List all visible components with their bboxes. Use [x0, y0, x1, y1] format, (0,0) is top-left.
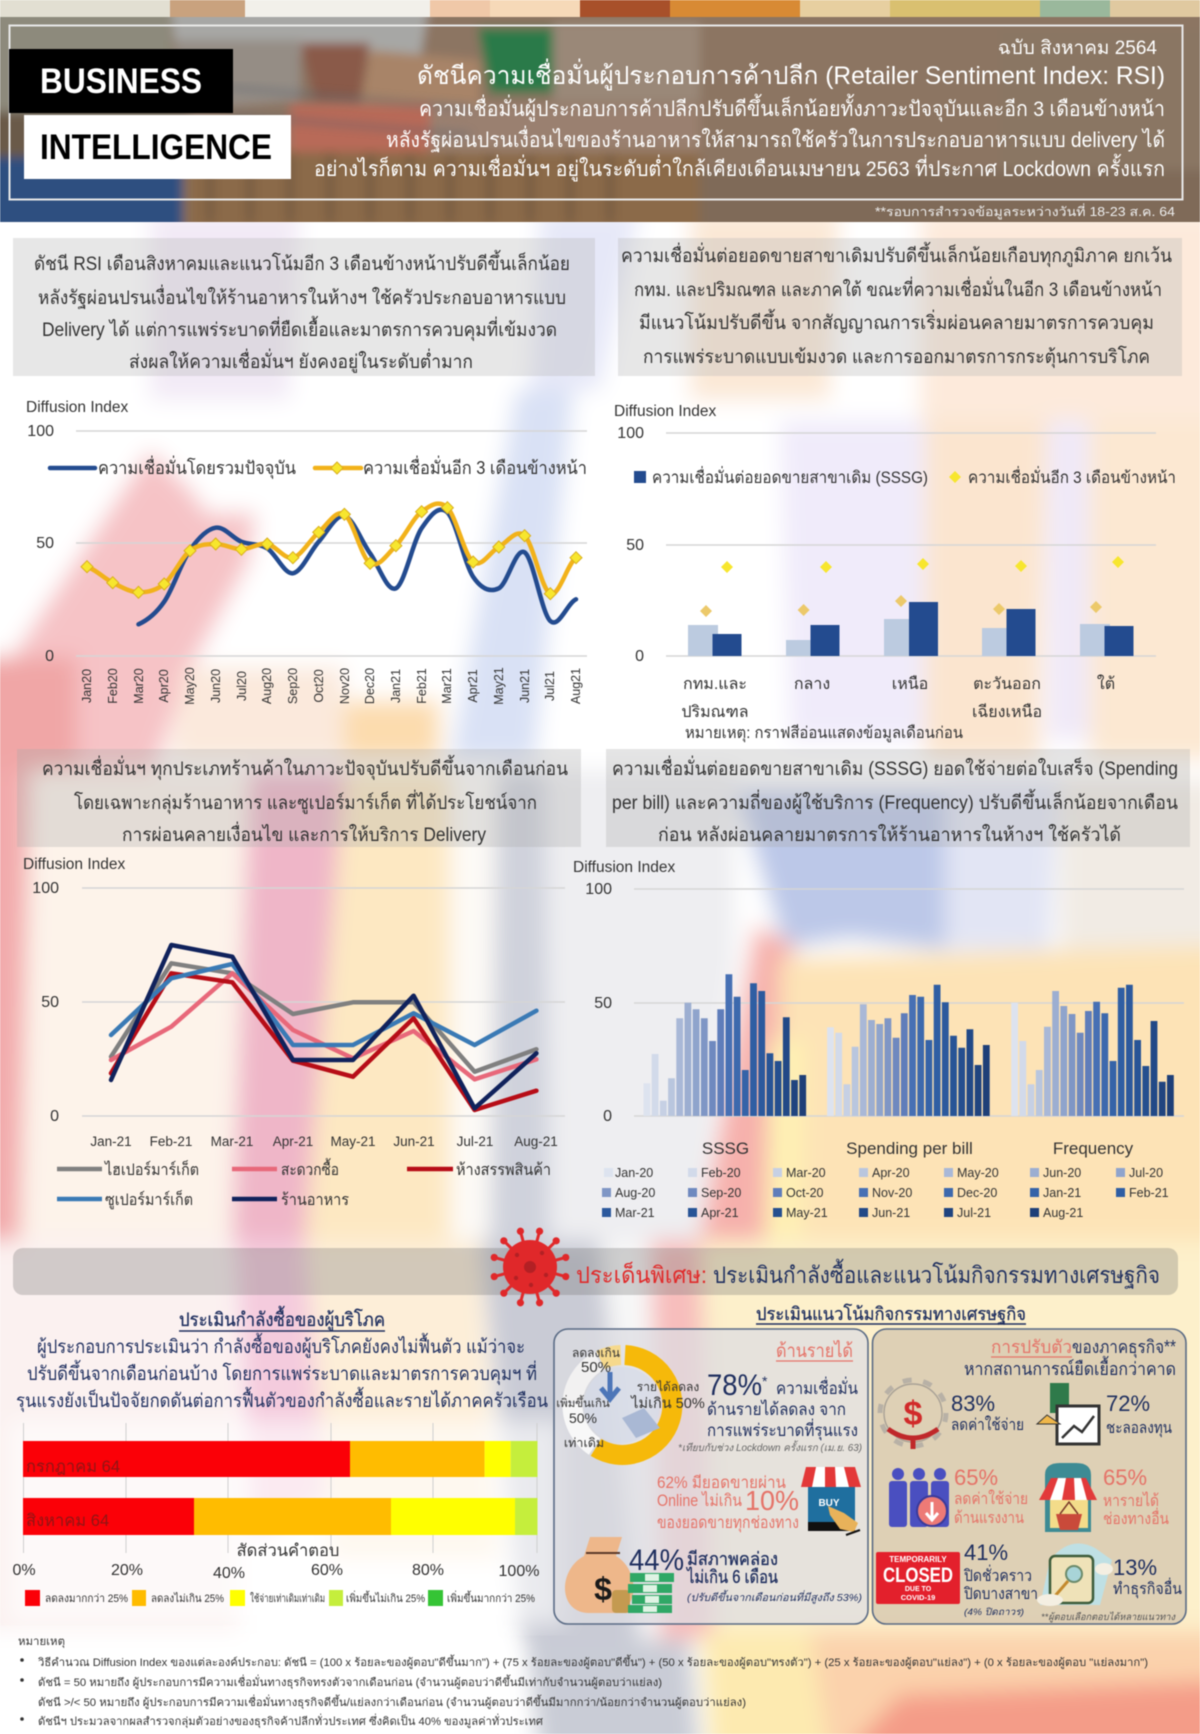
panel: SSSG spending frequency summary: ก่อน หลังผ่อนคลายมาตรการให้ร้านอาหารในห้างฯ ใช้ครัวได้ — [658, 824, 1121, 846]
axis percent labels: 60% — [311, 1562, 343, 1579]
axis labels: months 2021: Feb-21 — [150, 1134, 192, 1149]
legend: months: Mar-21 — [615, 1206, 655, 1220]
axis labels: months 2021: Apr-21 — [273, 1134, 313, 1149]
legend: overall sentiment: ความเชื่อมั่นโดยรวมปัจจุบัน — [98, 455, 296, 479]
text block: purchasing power: ปรับดีขึ้นจากเดือนก่อนบ้าง โดยการแพร่ระบาดและมาตรการควบคุมฯ ที่ — [27, 1360, 537, 1386]
notes: ดัชนี = 50 หมายถึง ผู้ประกอบการมีความเชื่อมั่นทางธุรกิจทรงตัวจากเดือนก่อน (จำนวนผู้ตอบว่าดีขึ้นมีเท่ากับจำนวนผู้ตอบว่าแย่ลง) — [38, 1674, 662, 1689]
stat: 83 percent: ลดค่าใช้จ่าย — [951, 1415, 1024, 1434]
panel: SSSG by region summary — [618, 238, 1182, 376]
line: hypermarket — [111, 963, 536, 1072]
panel: RSI summary: ดัชนี RSI เดือนสิงหาคมและแนวโน้มอีก 3 เดือนข้างหน้าปรับดีขึ้นเล็กน้อย — [34, 250, 570, 275]
notes — [18, 1636, 1148, 1728]
line: convenience store — [111, 973, 536, 1079]
notes: ดัชนีฯ ประมวลจากผลสำรวจกลุ่มตัวอย่างของธุรกิจค้าปลีกทั่วประเทศ ซึ่งคิดเป็น 40% ของมูลค่าทั่วประเทศ — [38, 1713, 543, 1728]
group labels: Frequency — [1053, 1139, 1134, 1158]
stat: 41 percent — [964, 1540, 1038, 1618]
icon: temporarily closed sign: COVID-19 — [901, 1593, 935, 1602]
stat: 72 percent — [1106, 1391, 1172, 1438]
panel heading: ของภาคธุรกิจ** — [1072, 1337, 1176, 1358]
stat: online 10 percent: Online ไม่เกิน — [657, 1491, 742, 1510]
chart: overall sentiment line chart: 100 — [27, 423, 54, 440]
axis labels: months 2021: Jan-21 — [90, 1134, 132, 1149]
panel heading: การปรับตัว — [991, 1337, 1072, 1357]
chart: overall sentiment line chart: 50 — [36, 535, 54, 552]
chart: overall sentiment line chart: Diffusion Index — [26, 399, 128, 416]
legend: store types: ไฮเปอร์มาร์เก็ต — [103, 1159, 199, 1179]
stat: 41 percent: (4% ปิดถาวร) — [964, 1607, 1024, 1618]
special topic band: ประเด็นพิเศษ: — [576, 1260, 707, 1288]
legend: months: Jul-21 — [957, 1206, 991, 1220]
logo: INTELLIGENCE: INTELLIGENCE — [40, 128, 272, 167]
panel: RSI summary — [13, 238, 595, 376]
donut labels: ไม่เกิน 50% — [630, 1394, 705, 1412]
bars: previous month — [688, 619, 1110, 656]
notes: หมายเหตุ — [18, 1636, 65, 1648]
axis percent labels: 20% — [111, 1562, 143, 1579]
group labels: SSSG — [702, 1139, 749, 1158]
icon: money bag: $ — [594, 1571, 612, 1607]
axis labels: months 2021: Jul-21 — [457, 1134, 493, 1149]
donut labels — [556, 1346, 705, 1450]
legend: store types: ร้านอาหาร — [281, 1191, 349, 1209]
panel: store types summary: ความเชื่อมั่นฯ ทุกประเภทร้านค้าในภาวะปัจจุบันปรับดีขึ้นจากเดือนก่อน — [42, 755, 568, 781]
axis labels: months — [80, 667, 583, 705]
legend: response scale: ลดลงไม่เกิน 25% — [151, 1592, 224, 1605]
legend: months: May-21 — [786, 1206, 828, 1220]
panel: business adaptation — [872, 1329, 1186, 1624]
legend: months: Jan-21 — [1043, 1186, 1081, 1200]
stat: 83 percent — [951, 1391, 1024, 1434]
panel: store types summary: โดยเฉพาะกลุ่มร้านอาหาร และซูเปอร์มาร์เก็ต ที่ได้ประโยชน์จาก — [74, 789, 537, 815]
header text block: ความเชื่อมั่นผู้ประกอบการค้าปลีกปรับดีขึ้นเล็กน้อยทั้งภาวะปัจจุบันและอีก 3 เดือนข้างหน้า — [419, 94, 1165, 122]
stat: 65 percent labour: ด้านแรงงาน — [954, 1509, 1024, 1527]
stat: 65 percent labour: ลดค่าใช้จ่าย — [954, 1489, 1028, 1508]
chart: sentiment by store type — [23, 856, 565, 1210]
stat: 78 percent: 78% — [707, 1369, 762, 1402]
icon: virus — [490, 1227, 570, 1307]
stat: 13 percent: ทำธุรกิจอื่น — [1113, 1577, 1182, 1599]
panel: income: ด้านรายได้ — [776, 1340, 853, 1362]
stat: 78 percent — [678, 1369, 862, 1454]
stat: online 10 percent: 62% มียอดขายผ่าน — [657, 1474, 786, 1492]
chart: SSSG spending per bill frequency: 100 — [585, 881, 612, 898]
stat: 78 percent: ความเชื่อมั่น — [776, 1376, 858, 1398]
stat: 44 percent — [629, 1544, 862, 1604]
donut labels: 50% — [581, 1359, 611, 1376]
legend: response scale: ลดลงมากกว่า 25% — [45, 1593, 128, 1605]
legend: months: Jun-20 — [1043, 1166, 1081, 1180]
stat: 78 percent: *เทียบกับช่วง Lockdown ครั้งแรก (เม.ย. 63) — [678, 1440, 862, 1454]
stat: 65 percent new channel: ช่องทางอื่น — [1103, 1507, 1169, 1528]
stat: 44 percent: มีสภาพคล่อง — [687, 1549, 778, 1569]
notes: ดัชนี >/< 50 หมายถึง ผู้ประกอบการมีความเชื่อมั่นทางธุรกิจดีขึ้น/แย่ลงกว่าเดือนก่อน (จำนวนผู้ตอบว่าดีขึ้นมีมากกว่า/น้อยกว่าจำนวนผู้ตอบว่าแย่ลง) — [38, 1694, 746, 1709]
stat: 65 percent labour: 65% — [954, 1465, 998, 1490]
line: supermarket — [111, 964, 536, 1045]
legend: months: Oct-20 — [786, 1186, 824, 1200]
bars: frequency — [1015, 985, 1170, 1116]
panel: SSSG by region summary: มีแนวโน้มปรับดีขึ้น จากสัญญาณการเริ่มผ่อนคลายมาตรการควบคุม — [639, 309, 1154, 335]
axis labels: months: Aug20 — [260, 668, 274, 704]
chart: SSSG spending per bill frequency — [573, 859, 1184, 1220]
donut labels: รายได้ลดลง — [637, 1380, 699, 1394]
category labels: ปริมณฑล — [681, 704, 749, 721]
axis labels: months 2021: Mar-21 — [211, 1134, 253, 1149]
category labels: กทม.และ — [683, 676, 747, 693]
legend: response scale: เพิ่มขึ้นมากกว่า 25% — [447, 1590, 535, 1605]
legend: store types: ซูเปอร์มาร์เก็ต — [105, 1189, 193, 1210]
legend: store types — [57, 1158, 551, 1210]
chart: SSSG spending per bill frequency: 0 — [603, 1108, 612, 1125]
stat: online 10 percent: 10% — [745, 1485, 799, 1516]
axis labels: months: Jul20 — [235, 671, 249, 701]
legend: response scale — [25, 1590, 535, 1606]
panel: SSSG by region summary: การแพร่ระบาดแบบเข้มงวด และการออกมาตรการกระตุ้นการบริโภค — [643, 345, 1150, 369]
panel heading: หากสถานการณ์ยืดเยื้อกว่าคาด — [964, 1356, 1176, 1379]
legend: months: Apr-20 — [872, 1166, 910, 1180]
line: restaurant — [111, 945, 536, 1108]
axis labels: months 2021 — [90, 1134, 558, 1149]
legend: SSSG: ความเชื่อมั่นอีก 3 เดือนข้างหน้า — [968, 466, 1176, 487]
axis labels: months: May20 — [183, 667, 197, 705]
chart: SSSG spending per bill frequency: 50 — [594, 995, 612, 1012]
donut chart: income — [572, 1355, 672, 1455]
legend: months: Apr-21 — [701, 1206, 739, 1220]
text block: purchasing power — [16, 1333, 548, 1413]
chart: SSSG by region bar chart: 100 — [617, 425, 644, 442]
donut labels: เท่าเดิม — [564, 1436, 604, 1450]
chart: overall sentiment line chart: 0 — [45, 648, 54, 665]
stat: 78 percent: * — [762, 1373, 768, 1389]
bars: spending per bill — [830, 985, 986, 1116]
axis percent labels — [12, 1562, 539, 1582]
icon: online shop phone: BUY — [818, 1498, 840, 1509]
legend: months: Dec-20 — [957, 1186, 997, 1200]
stat: 41 percent: 41% — [964, 1540, 1008, 1565]
axis labels: months 2021: Aug-21 — [514, 1134, 558, 1149]
chart: sentiment by store type: 0 — [50, 1108, 59, 1125]
logo: INTELLIGENCE — [24, 115, 291, 179]
chart: stacked bars purchasing power: สัดส่วนคำตอบ — [237, 1542, 339, 1560]
panel: RSI summary: Delivery ได้ แต่การแพร่ระบาดที่ยืดเยื้อและมาตรการควบคุมที่เข้มงวด — [42, 316, 557, 342]
axis percent labels: 40% — [213, 1565, 245, 1582]
panel: income — [554, 1329, 868, 1624]
panel: RSI summary: หลังรัฐผ่อนปรนเงื่อนไขให้ร้านอาหารในห้างฯ ใช้ครัวประกอบอาหารแบบ — [38, 284, 566, 309]
header text block: **รอบการสำรวจข้อมูลระหว่างวันที่ 18-23 ส.ค. 64 — [875, 203, 1175, 220]
stat: 13 percent: 13% — [1113, 1555, 1157, 1580]
icon: magnifier other business — [1037, 1544, 1113, 1606]
heading: purchasing power: ประเมินกำลังซื้อของผู้บริโภค — [179, 1306, 385, 1331]
legend: response scale: ใช้จ่ายเท่าเดิมเท่าเดิม — [250, 1592, 325, 1605]
icon: investment chart — [1037, 1383, 1099, 1444]
legend: months: May-20 — [957, 1166, 999, 1180]
text block: purchasing power: ผู้ประกอบการประเมินว่า กำลังซื้อของผู้บริโภคยังคงไม่ฟื้นตัว แม้ว่าจะ — [37, 1333, 525, 1358]
panel: store types summary: การผ่อนคลายเงื่อนไข และการให้บริการ Delivery — [122, 821, 486, 846]
axis labels: months: Feb20 — [106, 668, 120, 704]
axis labels: months: Jun21 — [518, 669, 532, 703]
legend: months: Aug-21 — [1043, 1206, 1083, 1220]
icon: online shop phone — [801, 1467, 861, 1535]
chart: sentiment by store type: 50 — [41, 994, 59, 1011]
markers: 3-month outlook — [81, 502, 582, 600]
category labels: ใต้ — [1097, 674, 1115, 693]
donut labels: ลดลงเกิน — [572, 1346, 620, 1360]
stat: 78 percent: การแพร่ระบาดที่รุนแรง — [707, 1418, 858, 1441]
stat: 65 percent new channel — [1103, 1465, 1169, 1528]
line: 3-month outlook — [87, 504, 576, 594]
legend: store types: ห้างสรรพสินค้า — [456, 1161, 551, 1179]
bars: current month — [712, 602, 1134, 656]
category labels: ตะวันออก — [973, 676, 1041, 693]
stat: 65 percent labour — [954, 1465, 1028, 1527]
stat: 78 percent: ด้านรายได้ลดลง จาก — [707, 1399, 846, 1419]
legend: months: Mar-20 — [786, 1166, 826, 1180]
axis labels: months: Oct20 — [312, 669, 326, 703]
bars: SSSG — [647, 974, 803, 1116]
stat: 72 percent: 72% — [1106, 1391, 1150, 1416]
stat: online 10 percent: ของยอดขายทุกช่องทาง — [657, 1514, 799, 1533]
axis labels: months: Feb21 — [415, 668, 429, 704]
group labels: Spending per bill — [846, 1139, 973, 1158]
axis labels: months: Dec20 — [363, 668, 377, 704]
legend: months: Nov-20 — [872, 1186, 912, 1200]
legend: SSSG: ความเชื่อมั่นต่อยอดขายสาขาเดิม (SSSG) — [652, 466, 928, 487]
axis labels: months 2021: May-21 — [330, 1134, 376, 1149]
notes: วิธีคำนวณ Diffusion Index ของแต่ละองค์ประกอบ: ดัชนี = (100 x ร้อยละของผู้ตอบ"ดีขึ้นมาก") + (75 x ร้อยละของผู้ตอบ"ดีขึ้น") + (50 x ร้อยละของผู้ตอบ"ทรงตัว") + (25 x ร้อยละของผู้ตอบ"แย่ลง") + (0 x ร้อยละของผู้ตอบ "แย่ลงมาก") — [37, 1654, 1148, 1669]
stat: 44 percent: 44% — [629, 1544, 684, 1577]
chart: SSSG by region bar chart: หมายเหตุ: กราฟสีอ่อนแสดงข้อมูลเดือนก่อน — [685, 724, 963, 743]
icon: temporarily closed sign — [876, 1552, 960, 1604]
header text block: อย่างไรก็ตาม ความเชื่อมั่นฯ อยู่ในระดับต่ำใกล้เคียงเดือนเมษายน 2563 ที่ประกาศ Lockdown ครั้งแรก — [314, 154, 1165, 182]
stat: 41 percent: ปิดบางสาขา — [964, 1586, 1038, 1603]
chart: SSSG by region bar chart — [614, 403, 1176, 743]
legend: months: Jul-20 — [1129, 1166, 1163, 1180]
stat: 65 percent new channel: หารายได้ — [1103, 1491, 1159, 1510]
markers: outlook current — [721, 556, 1124, 573]
donut labels: 50% — [569, 1410, 597, 1426]
row: July 64: กรกฎาคม 64 — [26, 1458, 120, 1476]
category labels: เหนือ — [892, 675, 928, 693]
axis labels: months: Jul21 — [543, 671, 557, 701]
axis percent labels: 80% — [412, 1562, 444, 1579]
panel: business adaptation: **ผู้ตอบเลือกตอบได้หลายแนวทาง — [1041, 1611, 1176, 1623]
stat: 83 percent: 83% — [951, 1391, 995, 1416]
heading: economic activity: ประเมินแนวโน้มกิจกรรมทางเศรษฐกิจ — [756, 1303, 1026, 1325]
markers: outlook previous — [700, 595, 1102, 617]
axis labels: months: Aug21 — [569, 668, 583, 704]
chart: sentiment by store type: 100 — [32, 880, 59, 897]
axis percent labels: 100% — [499, 1563, 539, 1580]
legend: months: Aug-20 — [615, 1186, 655, 1200]
legend: months: Sep-20 — [701, 1186, 741, 1200]
legend: store types: สะดวกซื้อ — [281, 1158, 339, 1179]
chart: SSSG by region bar chart: 0 — [635, 648, 644, 665]
logo: BUSINESS: BUSINESS — [40, 62, 202, 101]
legend: overall sentiment: ความเชื่อมั่นอีก 3 เดือนข้างหน้า — [363, 455, 587, 478]
panel: SSSG spending frequency summary — [606, 749, 1190, 847]
legend: months — [602, 1166, 1169, 1220]
category labels: เฉียงเหนือ — [972, 703, 1042, 721]
row: August 64 — [23, 1498, 538, 1535]
chart: overall sentiment line chart — [26, 399, 587, 705]
legend: months: Jan-20 — [615, 1166, 653, 1180]
axis labels: months: May21 — [492, 667, 506, 705]
row: July 64 — [23, 1441, 538, 1477]
icon: shop basket — [1039, 1463, 1097, 1532]
axis labels: months: Jun20 — [209, 669, 223, 703]
title: ดัชนีความเชื่อมั่นผู้ประกอบการค้าปลีก (Retailer Sentiment Index: RSI) — [417, 58, 1165, 91]
axis labels: months: Mar20 — [132, 668, 146, 704]
icon: temporarily closed sign: TEMPORARILY — [889, 1555, 947, 1564]
line: current sentiment — [138, 510, 576, 624]
legend: months: Jun-21 — [872, 1206, 910, 1220]
panel heading — [964, 1337, 1176, 1379]
axis labels: months: Apr21 — [466, 669, 480, 703]
icon: money bag — [565, 1537, 674, 1613]
axis labels: months: Sep20 — [286, 668, 300, 704]
special topic band: ประเมินกำลังซื้อและแนวโน้มกิจกรรมทางเศรษฐกิจ — [713, 1259, 1160, 1289]
text block: purchasing power: รุนแรงยังเป็นปัจจัยกดดันต่อการฟื้นตัวของกำลังซื้อและรายได้ภาคครัวเรือน — [16, 1387, 548, 1413]
icon: temporarily closed sign: CLOSED — [883, 1564, 953, 1587]
icon: temporarily closed sign: DUE TO — [905, 1586, 932, 1593]
group labels — [702, 1139, 1134, 1158]
icon: gear dollar — [880, 1380, 946, 1449]
panel: SSSG by region summary: ความเชื่อมั่นต่อยอดขายสาขาเดิมปรับดีขึ้นเล็กน้อยเกือบทุกภูมิภาค ยกเว้น — [621, 242, 1172, 268]
legend: response scale: เพิ่มขึ้นไม่เกิน 25% — [346, 1590, 425, 1605]
panel: store types summary — [17, 749, 581, 847]
panel: RSI summary: ส่งผลให้ความเชื่อมั่นฯ ยังคงอยู่ในระดับต่ำมาก — [129, 348, 473, 373]
header text block: ฉบับ สิงหาคม 2564 — [998, 38, 1157, 59]
axis labels: months: Mar21 — [440, 668, 454, 704]
header frame — [10, 26, 1182, 200]
chart: sentiment by store type: Diffusion Index — [23, 856, 125, 873]
legend: months: Feb-21 — [1129, 1186, 1169, 1200]
stat: online 10 percent — [657, 1474, 799, 1533]
stat: 72 percent: ชะลอลงทุน — [1106, 1420, 1172, 1438]
stat: 13 percent — [1113, 1555, 1182, 1599]
donut labels: เพิ่มขึ้นเกิน — [556, 1395, 610, 1410]
axis percent labels: 0% — [12, 1562, 36, 1579]
icon: gear dollar: $ — [904, 1395, 923, 1433]
chart: SSSG spending per bill frequency: Diffusion Index — [573, 859, 675, 876]
axis labels: months: Jan21 — [389, 669, 403, 703]
chart: stacked bars purchasing power — [12, 1423, 539, 1606]
special topic band — [13, 1248, 1178, 1295]
axis labels: months: Apr20 — [157, 669, 171, 703]
stat: 41 percent: ปิดชั่วคราว — [964, 1564, 1032, 1585]
stat: 65 percent new channel: 65% — [1103, 1465, 1147, 1490]
logo: BUSINESS — [9, 49, 233, 113]
chart: SSSG by region bar chart: 50 — [626, 537, 644, 554]
stat: 44 percent: ไม่เกิน 6 เดือน — [685, 1566, 778, 1587]
header text block — [314, 38, 1175, 220]
axis labels: months: Jan20 — [80, 669, 94, 703]
chart: SSSG by region bar chart: Diffusion Index — [614, 403, 716, 420]
legend: months: Feb-20 — [701, 1166, 741, 1180]
line: department store — [111, 973, 536, 1110]
legend: overall sentiment — [50, 455, 587, 479]
legend: SSSG — [634, 466, 1176, 487]
row: August 64: สิงหาคม 64 — [26, 1512, 109, 1530]
axis labels: months: Nov20 — [338, 668, 352, 704]
axis labels: months 2021: Jun-21 — [393, 1134, 435, 1149]
icon: workers — [889, 1468, 949, 1527]
category labels — [681, 674, 1115, 721]
category labels: กลาง — [794, 676, 830, 693]
stat: 44 percent: (ปรับดีขึ้นจากเดือนก่อนที่มีสูงถึง 53%) — [687, 1589, 862, 1604]
